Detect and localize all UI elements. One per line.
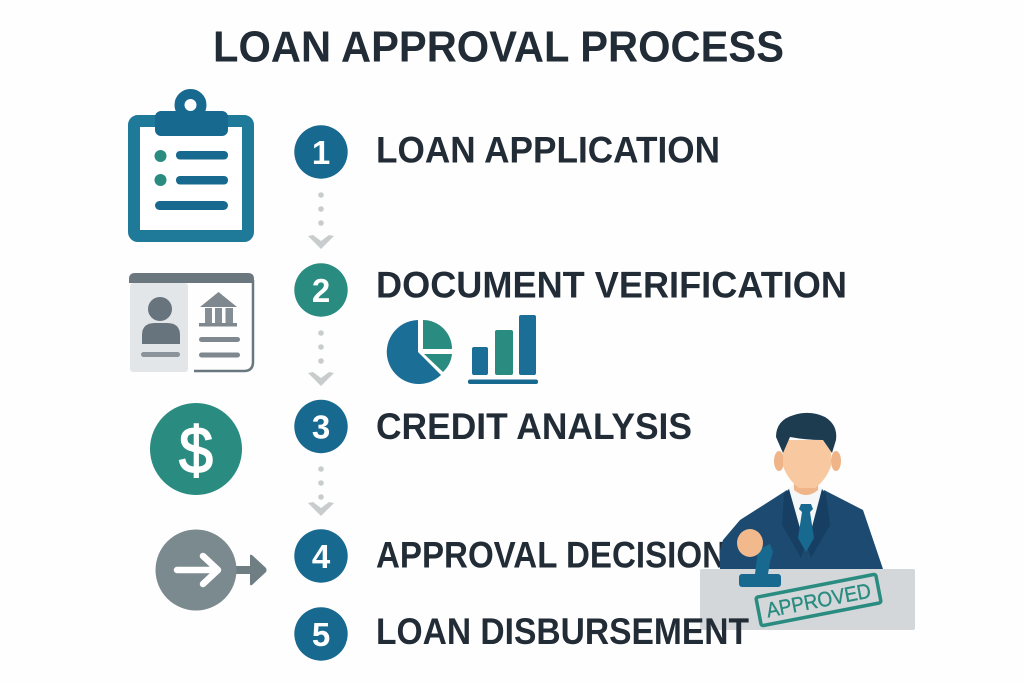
step 1 badge: [294, 125, 348, 179]
step 2 badge: [294, 263, 348, 317]
icon: clipboard: [134, 94, 248, 236]
step 3 badge: [294, 400, 348, 453]
desk: [700, 569, 915, 630]
step 4 badge: [294, 529, 348, 583]
heading: credit analysis: CREDIT ANALYSIS: [376, 406, 692, 447]
icon: decision arrow: [156, 530, 266, 610]
illustration: banker approving loan: [700, 413, 915, 630]
arrow: step 1 to 2: [308, 192, 334, 249]
icon: bar chart: [468, 315, 538, 384]
step 3 badge: 3: [312, 408, 330, 446]
icon: pie chart: [387, 320, 452, 384]
heading: document verification: DOCUMENT VERIFICATION: [376, 264, 847, 306]
banker figure: [720, 413, 883, 569]
heading: approval decision: APPROVAL DECISION: [376, 534, 726, 576]
step 4 badge: 4: [312, 538, 331, 575]
icon: dollar coin: [150, 403, 242, 495]
icon: dollar coin: $: [179, 413, 213, 487]
step 1 badge: 1: [312, 134, 330, 171]
icon: id card with bank: [129, 273, 254, 372]
step 2 badge: 2: [312, 272, 330, 309]
step 5 badge: [294, 607, 348, 661]
title: LOAN APPROVAL PROCESS: [213, 22, 784, 72]
heading: loan disbursement: LOAN DISBURSEMENT: [376, 611, 749, 652]
heading: loan application: LOAN APPLICATION: [376, 130, 720, 170]
arrow: step 3 to 4: [308, 466, 334, 516]
approved stamp mark: APPROVED: [764, 580, 873, 622]
arrow: step 2 to 3: [308, 330, 334, 386]
step 5 badge: 5: [312, 616, 330, 653]
stamp: [737, 529, 781, 587]
